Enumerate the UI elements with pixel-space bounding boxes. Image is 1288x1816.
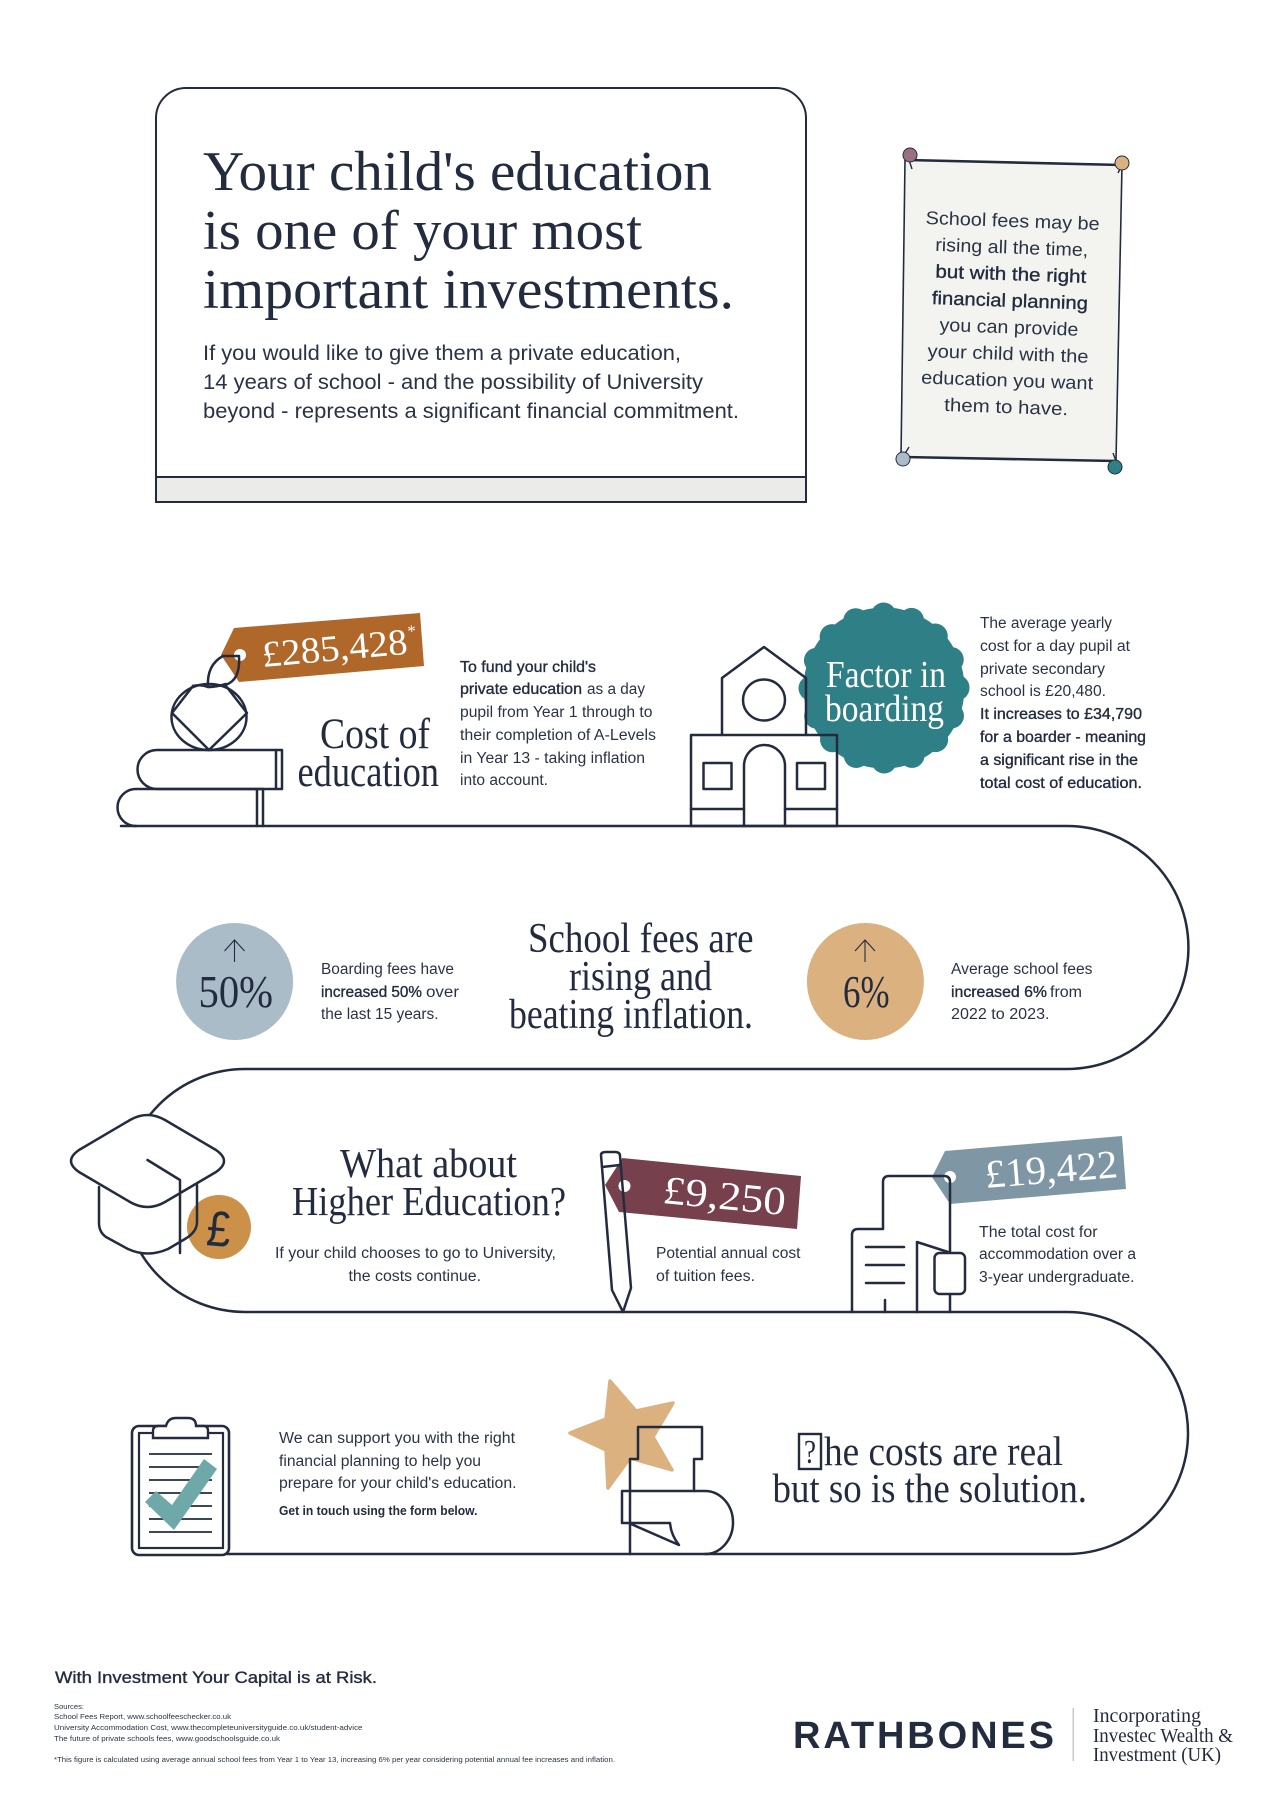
price tag: 285,428: £285,428 [260, 622, 409, 676]
icon: accommodation building [852, 1176, 965, 1312]
price tag: 9,250: £9,250 [661, 1167, 788, 1224]
stat: 50 percent: 50% [198, 966, 273, 1017]
price tag: 285,428 [221, 613, 424, 682]
heading: costs are real: but so is the solution. [772, 1465, 1087, 1511]
text: funding cost: in Year 13 - taking inflation [460, 750, 645, 767]
text: boarding fees rise: the last 15 years. [321, 1006, 438, 1023]
missing glyph box [799, 1434, 821, 1471]
text: boarding fees rise: over [426, 984, 459, 1001]
note text: your child with the [927, 340, 1089, 367]
intro text: If you would like to give them a private education, [203, 342, 681, 365]
sources: University Accommodation Cost, www.thecompleteuniversityguide.co.uk/student-advice [54, 1723, 362, 1732]
text: school fees rise: increased 6% [951, 984, 1047, 1001]
note text: you can provide [939, 314, 1079, 340]
price tag: 19,422 [932, 1136, 1126, 1204]
note text: rising all the time, [935, 234, 1089, 260]
intro text [203, 342, 739, 423]
text: accommodation cost: 3-year undergraduate. [979, 1269, 1134, 1286]
text: funding cost: into account. [460, 772, 548, 789]
text: support: Get in touch using the form below. [279, 1504, 478, 1518]
intro text: 14 years of school - and the possibility of University [203, 371, 704, 394]
heading: school fees rising: beating inflation. [509, 992, 753, 1038]
note text [919, 207, 1100, 420]
note text: School fees may be [925, 207, 1100, 234]
stat: 50 percent [176, 923, 293, 1040]
heading: school fees rising [509, 916, 754, 1038]
badge: factor in boarding: Factor in [826, 654, 946, 696]
text: funding cost: as a day [587, 681, 645, 698]
text: tuition fees: of tuition fees. [656, 1268, 755, 1285]
heading: higher education: Higher Education? [292, 1178, 566, 1224]
sources: Sources: [54, 1702, 84, 1711]
badge: factor in boarding [804, 608, 964, 768]
text: accommodation cost [979, 1224, 1136, 1286]
icon: star and scroll [570, 1381, 733, 1554]
arrow up [855, 940, 875, 962]
text: boarding cost: school is £20,480. [980, 683, 1106, 700]
text: university costs: the costs continue. [348, 1268, 481, 1285]
heading: costs are real: he costs are real [824, 1428, 1063, 1474]
heading: cost of education: Cost of [320, 711, 431, 758]
text: school fees rise [951, 961, 1093, 1023]
logo strapline: Investec Wealth & [1093, 1725, 1233, 1747]
text: tuition fees: Potential annual cost [656, 1245, 801, 1262]
risk warning: With Investment Your Capital is at Risk. [55, 1668, 377, 1687]
text: boarding cost: a significant rise in the [980, 752, 1138, 769]
logo: Rathbones: RATHBONES [793, 1715, 1054, 1757]
panel: pinned note [896, 148, 1129, 474]
text: accommodation cost: accommodation over a [979, 1246, 1136, 1263]
text: tuition fees [656, 1245, 801, 1285]
icon: apple on books [118, 656, 282, 826]
text: boarding fees rise: increased 50% [321, 984, 422, 1001]
note text: but with the right [935, 261, 1087, 287]
icon: school building [691, 647, 837, 826]
text: support: prepare for your child's education. [279, 1475, 516, 1492]
text: boarding cost: It increases to £34,790 [980, 706, 1142, 723]
text: support [279, 1430, 516, 1518]
text: school fees rise: 2022 to 2023. [951, 1006, 1050, 1023]
stat: 6 percent: 6% [843, 966, 890, 1017]
text: boarding cost [980, 615, 1146, 792]
price tag: 19,422: £19,422 [983, 1141, 1119, 1197]
heading: school fees rising: rising and [569, 954, 712, 1000]
text: university costs: If your child chooses to go to University, [275, 1245, 556, 1262]
intro text: beyond - represents a significant financial commitment. [203, 400, 739, 423]
sources: The future of private schools fees, www.goodschoolsguide.co.uk [54, 1734, 280, 1743]
title: important investments. [203, 259, 734, 321]
sources: School Fees Report, www.schoolfeeschecker.co.uk [54, 1712, 231, 1721]
text: boarding cost: cost for a day pupil at [980, 638, 1131, 655]
heading: school fees rising: School fees are [528, 916, 754, 962]
icon: clipboard with check [132, 1418, 229, 1555]
text: school fees rise: from [1050, 984, 1082, 1001]
heading: cost of education [298, 711, 439, 796]
text: university costs [275, 1245, 556, 1285]
title [203, 141, 734, 321]
text: support: We can support you with the right [279, 1430, 516, 1447]
missing glyph box: ? [804, 1434, 816, 1471]
price tag: 285,428: * [407, 621, 417, 641]
text: boarding cost: for a boarder - meaning [980, 729, 1146, 746]
note pins [896, 148, 1129, 474]
arrow up [224, 940, 244, 962]
sources [54, 1702, 615, 1764]
heading: costs are real [772, 1428, 1087, 1511]
price tag: 9,250 [605, 1158, 801, 1229]
badge: factor in boarding: boarding [825, 688, 944, 730]
text: boarding cost: total cost of education. [980, 775, 1142, 792]
text: boarding fees rise [321, 961, 459, 1023]
heading: higher education: What about [340, 1140, 518, 1186]
heading: higher education [292, 1140, 566, 1224]
panel: intro [156, 88, 806, 502]
note text: them to have. [944, 394, 1069, 419]
text: boarding fees rise: Boarding fees have [321, 961, 454, 978]
text: funding cost [460, 659, 656, 789]
winding path line [121, 826, 1188, 1554]
logo strapline: Incorporating [1093, 1705, 1201, 1727]
text: funding cost: private education [460, 681, 582, 698]
icon: graduation cap with coin [71, 1115, 251, 1259]
sources: *This figure is calculated using average annual school fees from Year 1 to Year 13, increasing 6% per year considering potential annual fee increases and inflation. [54, 1755, 615, 1764]
note text: financial planning [932, 287, 1088, 313]
text: school fees rise: Average school fees [951, 961, 1093, 978]
text: accommodation cost: The total cost for [979, 1224, 1098, 1241]
icon: pencil [601, 1152, 631, 1312]
text: funding cost: pupil from Year 1 through to [460, 704, 652, 721]
logo strapline: Investment (UK) [1093, 1744, 1221, 1766]
title: is one of your most [203, 200, 642, 262]
text: funding cost: To fund your child's [460, 659, 596, 676]
logo strapline [1093, 1705, 1233, 1766]
text: support: financial planning to help you [279, 1453, 481, 1470]
text: boarding cost: private secondary [980, 661, 1105, 678]
note text: education you want [921, 367, 1093, 394]
coin [187, 1195, 251, 1259]
icon: graduation cap with coin: £ [205, 1200, 233, 1258]
text: boarding cost: The average yearly [980, 615, 1112, 632]
heading: cost of education: education [298, 749, 439, 796]
stat: 6 percent [807, 923, 924, 1040]
logo: Rathbones [793, 1705, 1233, 1766]
title: Your child's education [203, 141, 712, 203]
text: funding cost: their completion of A-Levels [460, 727, 656, 744]
